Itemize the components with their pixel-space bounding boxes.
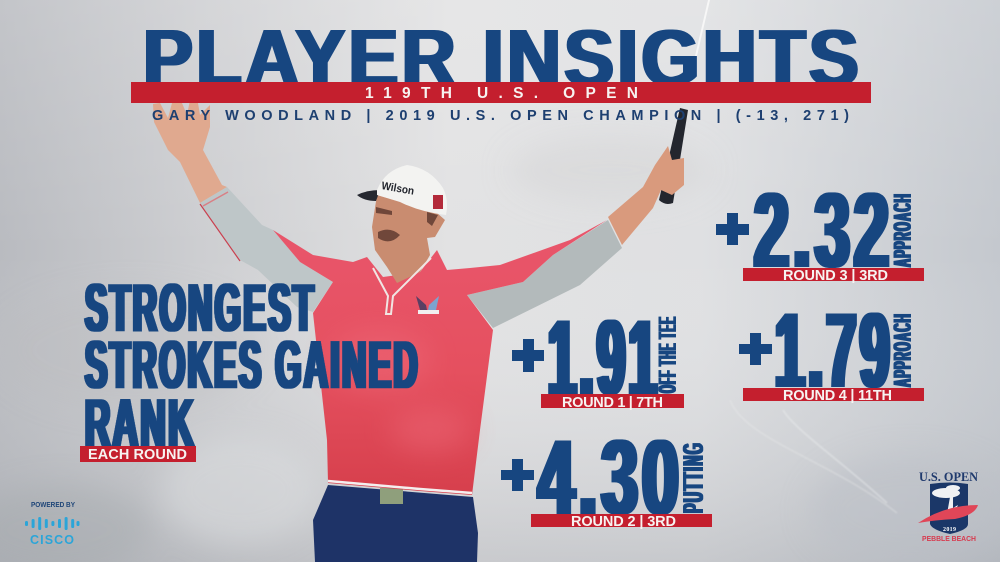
stat: round 4 approach: ROUND 4 | 11TH <box>783 388 892 404</box>
logo: powered by cisco: CISCO <box>30 533 74 547</box>
sleeve cuff stripe <box>203 192 228 206</box>
heading: strongest strokes gained rank <box>85 270 420 461</box>
red swoosh <box>918 505 978 523</box>
subtitle line: GARY WOODLAND | 2019 U.S. OPEN CHAMPION | (-13, 271) <box>152 108 849 124</box>
stat: round 1 off the tee: 1.91 <box>548 297 660 417</box>
player: Gary Woodland with arms raised <box>153 0 710 562</box>
stat: round 2 putting: PUTTING <box>678 442 710 513</box>
subtitle bar: 119TH U.S. OPEN <box>365 85 638 102</box>
heading: strongest strokes gained rank: STRONGEST <box>85 270 316 346</box>
text: STROKES GAINED <box>85 327 420 403</box>
title: PLAYER INSIGHTS <box>143 13 862 102</box>
stat: round 2 putting: ROUND 2 | 3RD <box>571 514 676 530</box>
right sleeve <box>467 220 622 328</box>
club grip <box>659 108 688 204</box>
chest logo <box>416 296 439 314</box>
logo: powered by cisco: POWERED BY <box>31 502 75 509</box>
subtitle bar <box>131 82 871 103</box>
shirt torso <box>273 220 607 495</box>
cap side logo <box>433 195 443 209</box>
stat: round 3 approach: ROUND 3 | 3RD <box>783 268 888 284</box>
mouth and eyes <box>376 207 438 241</box>
cap logo text: Wilson <box>380 180 415 198</box>
tree <box>932 485 960 514</box>
stat: round 3 approach: 2.32 <box>754 170 893 290</box>
stat: round 1 off the tee: OFF THE TEE <box>654 316 682 393</box>
cap bill <box>357 190 380 201</box>
stat: round 4 approach <box>739 290 924 410</box>
shirt mottling <box>330 330 470 452</box>
stat: round 2 putting <box>501 417 712 537</box>
label: each round: EACH ROUND <box>88 447 187 463</box>
left sleeve seam <box>200 204 240 261</box>
belt buckle <box>380 488 403 504</box>
left forearm and hand <box>153 100 227 203</box>
left sleeve <box>200 187 333 312</box>
cisco bars <box>25 517 80 530</box>
2019: 2019 <box>943 527 956 533</box>
stat: round 1 off the tee: ROUND 1 | 7TH <box>562 395 663 411</box>
stat: round 4 approach: APPROACH <box>889 313 917 387</box>
neck and face <box>372 195 445 283</box>
hem <box>328 481 472 493</box>
logo: powered by cisco <box>25 502 80 547</box>
pebble beach: PEBBLE BEACH <box>922 534 976 543</box>
pants <box>313 485 478 562</box>
cap crown <box>377 165 447 215</box>
heading: strongest strokes gained rank: RANK <box>85 385 196 461</box>
stat: round 2 putting: 4.30 <box>538 417 683 537</box>
logo: U.S. Open Pebble Beach <box>918 470 978 543</box>
right forearm and fist <box>608 146 684 245</box>
shield <box>930 482 968 534</box>
club shaft <box>695 0 710 56</box>
stat: round 1 off the tee <box>512 297 684 417</box>
stat: round 3 approach <box>716 170 924 290</box>
collar zipper <box>373 258 431 314</box>
stat: round 3 approach: APPROACH <box>889 193 917 267</box>
logo: U.S. Open Pebble Beach: U.S. OPEN <box>919 470 978 484</box>
